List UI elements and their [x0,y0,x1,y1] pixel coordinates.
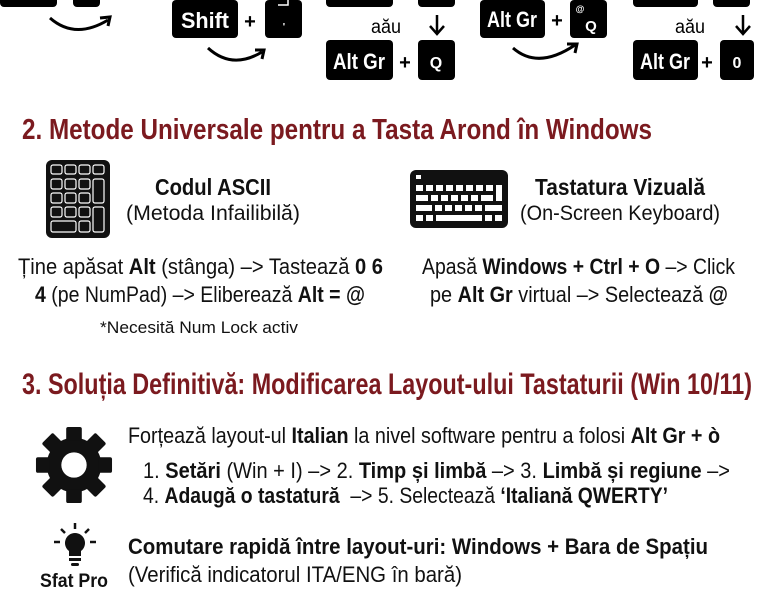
icon: numpad [46,160,110,238]
ASCII instructions: 4 (pe NumPad) –> Eliberează Alt = @ [35,282,365,307]
OSK instructions: Apasă Windows + Ctrl + O –> Click [422,254,735,279]
pro tip text: Comutare rapidă între layout-uri: Windows + Bara de Spațiu [128,534,708,559]
layout instructions: Forțează layout-ul Italian la nivel software pentru a folosi Alt Gr + ò [128,423,720,448]
layout instructions: 1. Setări (Win + I) –> 2. Timp și limbă –> 3. Limbă și regiune –> [143,458,730,483]
combo 3: Q [430,55,442,72]
arrow 2 [208,48,262,60]
combo 5: Alt Gr [640,49,690,74]
combo 3 [326,0,455,80]
icon: keyboard [410,170,508,228]
arrow 4 [513,45,575,58]
icon: lightbulb [54,523,96,566]
top key combos [0,0,754,80]
combo 5: aău [675,17,705,38]
heading 2: 2. Metode Universale pentru a Tasta Arond în Windows [22,114,652,146]
ASCII instructions: Ține apăsat Alt (stânga) –> Tastează 0 6 [18,254,383,279]
combo 4: + [551,10,563,32]
combo 2 shift keys [172,0,302,38]
OSK instructions [422,254,735,307]
combo 4: Q [585,18,597,35]
pro tip text: (Verifică indicatorul ITA/ENG în bară) [128,562,462,587]
combo 4: @ [576,4,585,14]
note: num lock: *Necesită Num Lock activ [100,318,298,337]
combo 1 keys [0,0,100,7]
combo 4: Alt Gr [487,7,537,32]
Tastatura subtitle: (On-Screen Keyboard) [520,202,720,225]
combo 2 shift keys: + [244,11,256,33]
combo 5: + [701,52,713,74]
Tastatura title: Tastatura Vizuală [535,174,705,200]
combo 2 shift keys: Shift [181,8,230,33]
arrow 1 [50,18,108,30]
combo 5 [633,0,754,80]
pro tip text [128,534,708,587]
ASCII subtitle: (Metoda Infailibilă) [126,202,300,225]
layout instructions [128,423,730,508]
layout instructions: 4. Adaugă o tastatură –> 5. Selectează ‘Italiană QWERTY’ [143,483,668,508]
OSK instructions: pe Alt Gr virtual –> Selectează @ [430,282,728,307]
combo 5: 0 [733,55,742,72]
ASCII instructions [18,254,383,307]
combo 4 [480,0,607,38]
icon: gear [36,427,112,503]
heading 3: 3. Soluția Definitivă: Modificarea Layout-ului Tastaturii (Win 10/11) [22,368,752,401]
label: Sfat Pro: Sfat Pro [40,571,108,592]
ASCII title: Codul ASCII [155,174,271,200]
combo 3: Alt Gr [333,49,385,74]
combo 2 shift keys: ' [283,22,285,33]
combo 3: aău [371,17,401,38]
combo 3: + [399,52,411,74]
